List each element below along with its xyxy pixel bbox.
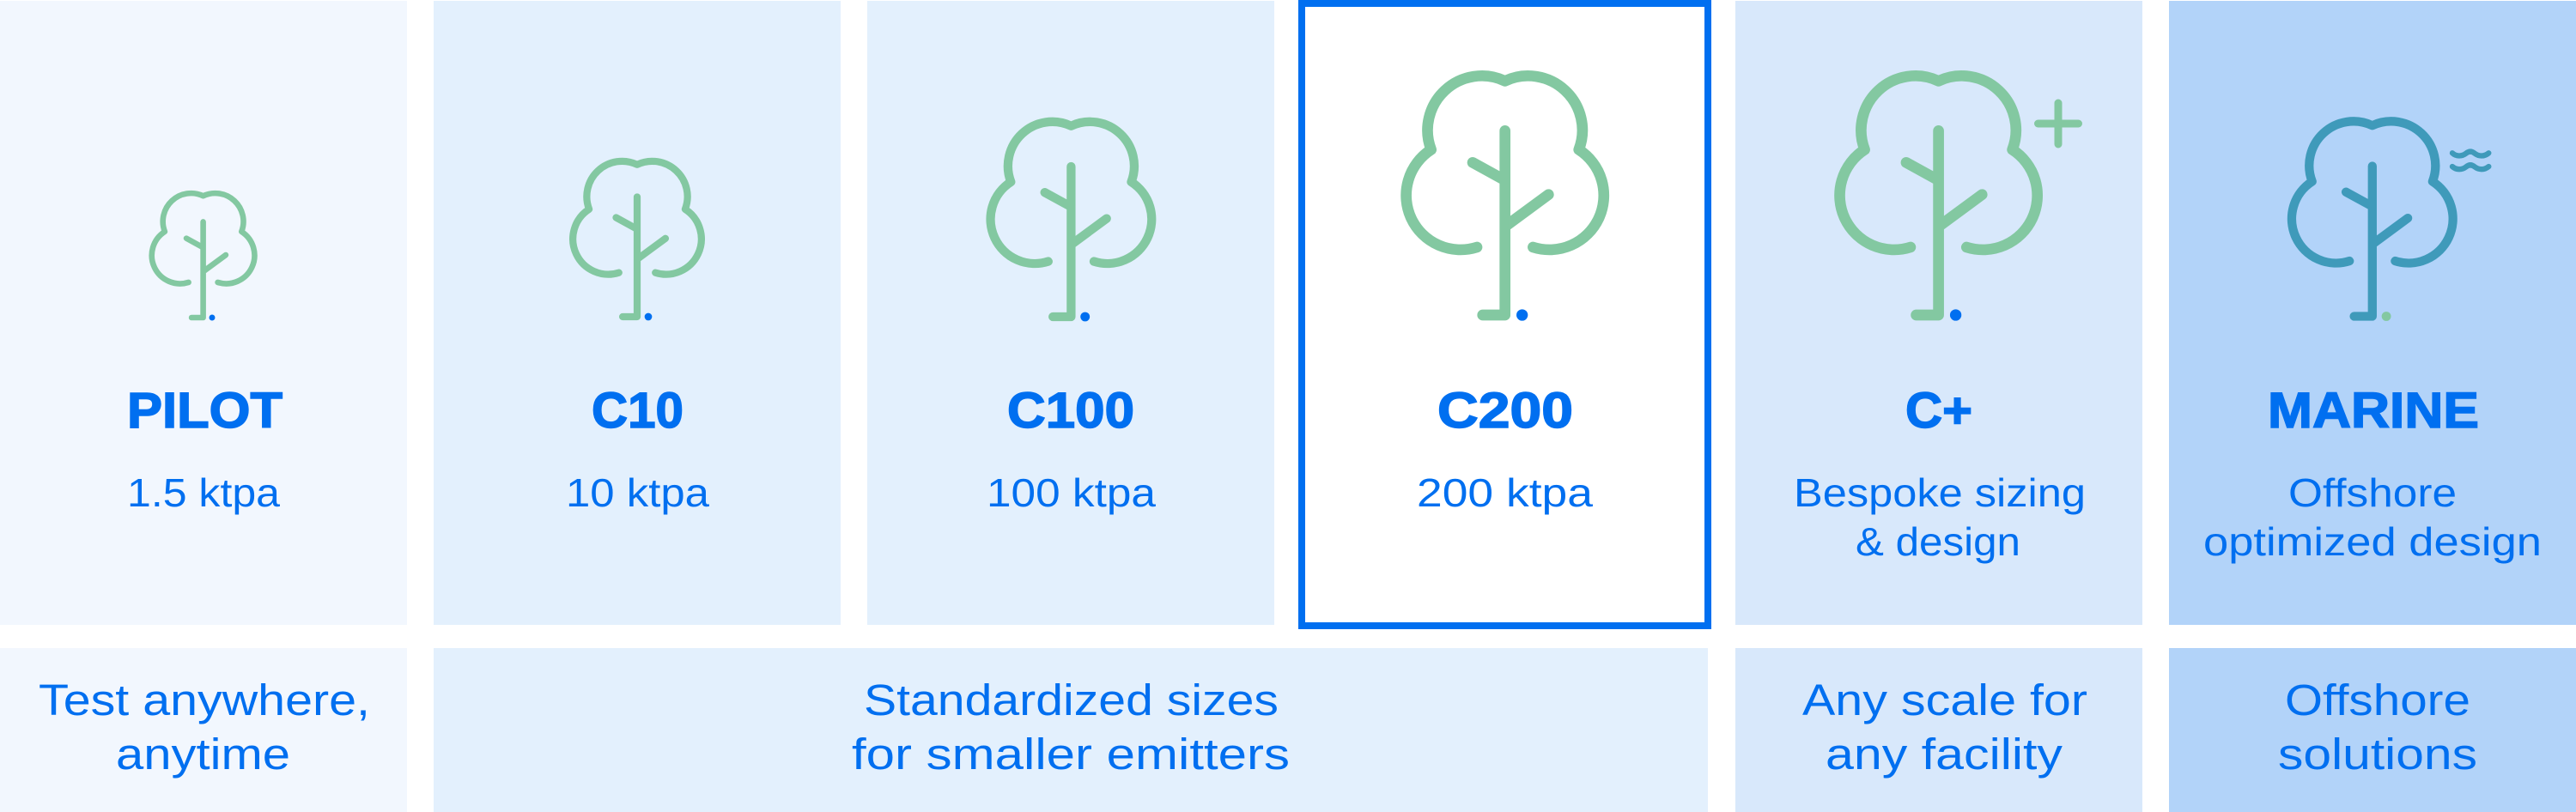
heading: C+: C+	[1905, 383, 1972, 439]
heading: C100: C100	[1007, 383, 1134, 439]
footer panel: test anywhere	[0, 648, 407, 812]
description: offshore optimized design	[2203, 470, 2542, 564]
icon: marine tree	[2292, 121, 2453, 321]
capacity: 200 ktpa: 200 ktpa	[1417, 470, 1593, 515]
icon: C10 tree	[573, 161, 702, 320]
icon: C200 tree	[1406, 76, 1604, 321]
footer panel: test anywhere: Test anywhere,	[39, 676, 370, 724]
icon: C100 tree	[991, 122, 1151, 321]
footer panel: offshore solutions: solutions	[2278, 730, 2477, 779]
description: bespoke sizing and design	[1794, 470, 2086, 564]
heading: MARINE: MARINE	[2268, 383, 2479, 439]
panel: C100	[867, 1, 1274, 625]
footer panel: any scale: any facility	[1826, 730, 2063, 779]
capacity: 1.5 ktpa: 1.5 ktpa	[127, 470, 280, 515]
icon: pilot tree	[152, 193, 254, 320]
description: bespoke sizing and design: Bespoke sizing	[1794, 470, 2086, 515]
panel: C200 highlighted	[1302, 3, 1708, 626]
capacity: 100 ktpa: 100 ktpa	[987, 470, 1156, 515]
footer panel: offshore solutions: Offshore	[2285, 676, 2470, 724]
capacity: 10 ktpa: 10 ktpa	[566, 470, 709, 515]
icon: C+ tree	[1840, 76, 2038, 321]
footer panel: standardized sizes: Standardized sizes	[864, 676, 1279, 724]
icon: plus sign	[2038, 103, 2078, 144]
footer panel: offshore solutions	[2169, 648, 2576, 812]
footer panel: standardized sizes	[434, 648, 1708, 812]
description: offshore optimized design: optimized design	[2203, 519, 2542, 564]
icon: waves	[2452, 152, 2488, 169]
panel: MARINE	[2169, 1, 2576, 625]
heading: C200: C200	[1437, 383, 1573, 439]
footer panel: standardized sizes: for smaller emitters	[852, 730, 1290, 779]
description: offshore optimized design: Offshore	[2288, 470, 2457, 515]
heading: PILOT: PILOT	[127, 383, 283, 439]
heading: C10: C10	[592, 383, 683, 439]
footer panel: test anywhere: anytime	[116, 730, 290, 779]
panel: C10	[434, 1, 841, 625]
footer panel: any scale	[1735, 648, 2142, 812]
description: bespoke sizing and design: & design	[1856, 519, 2020, 564]
footer panel: any scale: Any scale for	[1802, 676, 2087, 724]
panel: PILOT	[0, 1, 407, 625]
panel: C+	[1735, 1, 2142, 625]
